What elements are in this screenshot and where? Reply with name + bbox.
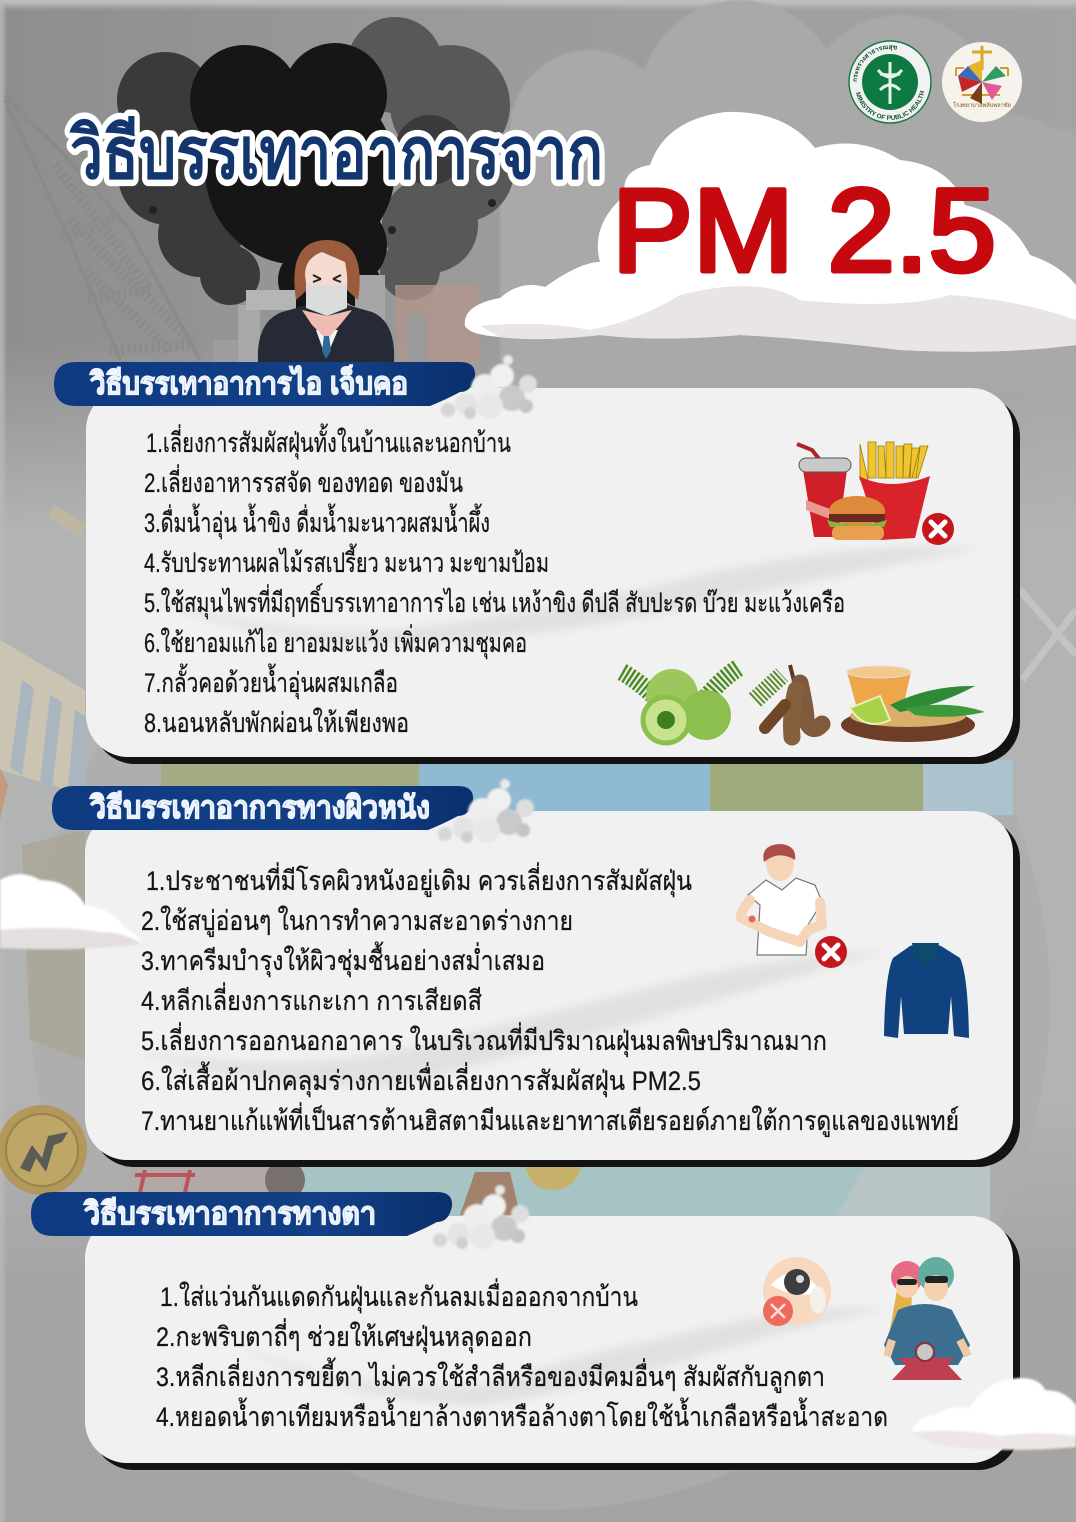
list of remedies: 4.รับประทานผลไม้รสเปรี้ยว มะนาว มะขามป้อม: [144, 543, 549, 578]
panel shadow: [92, 1223, 1020, 1470]
panel: skin symptoms: [52, 779, 1020, 1167]
smoke puff: [438, 779, 534, 843]
panel card: [85, 811, 1013, 1160]
black smoke cloud: [117, 17, 514, 312]
list of remedies: 2.เลี่ยงอาหารรสจัด ของทอด ของมัน: [144, 464, 463, 498]
list of remedies: [144, 423, 845, 738]
panel shadow: [93, 395, 1020, 764]
white cloud behind PM 2.5: [465, 112, 1076, 352]
panel card: [85, 1216, 1013, 1463]
list of remedies: 1.เลี่ยงการสัมผัสฝุ่นทั้งในบ้านและนอกบ้าน: [146, 423, 511, 460]
list of remedies: 7.กลั้วคอด้วยน้ำอุ่นผสมเกลือ: [144, 663, 398, 700]
list of remedies: 8.นอนหลับพักผ่อนให้เพียงพอ: [144, 707, 409, 738]
ribbon heading: [52, 786, 473, 836]
list of remedies: 2.กะพริบตาถี่ๆ ช่วยให้เศษฝุ่นหลุดออก: [156, 1318, 532, 1354]
cloud at left edge: [0, 874, 142, 949]
cloud at lower right: [912, 1378, 1076, 1450]
list of remedies: [156, 1278, 888, 1432]
list of remedies: 6.ใส่เสื้อผ้าปกคลุมร่างกายเพื่อเลี่ยงการสัมผัสฝุ่น PM2.5: [141, 1061, 701, 1098]
background: grey upper clouds: [500, 0, 1076, 390]
list of remedies: [141, 862, 959, 1137]
ribbon heading: [31, 1192, 452, 1242]
panel: cough and sore throat: [54, 355, 1020, 764]
icon: fast food: [797, 442, 954, 545]
background: eiffel tower silhouette: [5, 95, 200, 360]
man with mask: [258, 240, 394, 362]
list of remedies: 1.ใส่แว่นกันแดดกันฝุ่นและกันลมเมื่อออกจากบ้าน: [160, 1278, 638, 1314]
list of remedies: 4.หลีกเลี่ยงการแกะเกา การเสียดสี: [141, 982, 482, 1016]
ministry of public health logo: [848, 40, 932, 124]
list of remedies: 6.ใช้ยาอมแก้ไอ ยาอมมะแว้ง เพิ่มความชุมคอ: [144, 624, 527, 660]
background: coin: [0, 1105, 87, 1195]
city buildings behind figure: [213, 275, 482, 364]
ribbon heading: วิธีบรรเทาอาการไอ เจ็บคอ: [89, 364, 408, 401]
panel card: [86, 388, 1013, 757]
title: วิธีบรรเทาอาการจาก: [69, 114, 603, 194]
panel shadow: [92, 818, 1020, 1167]
smoke puff: [433, 1185, 529, 1249]
ribbon heading: [54, 362, 475, 412]
icon: Indian gooseberries: [622, 668, 738, 743]
list of remedies: 2.ใช้สบู่อ่อนๆ ในการทำความสะอาดร่างกาย: [141, 905, 573, 937]
list of remedies: 5.ใช้สมุนไพรที่มีฤทธิ์บรรเทาอาการไอ เช่น เหง้าขิง ดีปลี สับปะรด บ๊วย มะแว้งเครือ: [144, 583, 845, 620]
ribbon heading: วิธีบรรเทาอาการทางผิวหนัง: [89, 790, 430, 825]
ribbon heading: วิธีบรรเทาอาการทางตา: [83, 1196, 376, 1231]
list of remedies: 1.ประชาชนที่มีโรคผิวหนังอยู่เดิม ควรเลี่ยงการสัมผัสฝุ่น: [146, 862, 692, 898]
panel: eye symptoms: [31, 1185, 1020, 1470]
list of remedies: 3.ทาครีมบำรุงให้ผิวชุ่มชื้นอย่างสม่ำเสมอ: [141, 941, 545, 978]
ministry of public health logo: กระทรวงสาธารณสุข: [853, 45, 897, 82]
list of remedies: 4.หยอดน้ำตาเทียมหรือน้ำยาล้างตาหรือล้างตาโดยใช้น้ำเกลือหรือน้ำสะอาด: [156, 1397, 888, 1432]
list of remedies: 3.ดื่มน้ำอุ่น น้ำขิง ดื่มน้ำมะนาวผสมน้ำผึ้ง: [144, 503, 490, 540]
icon: couple on scooter: [884, 1257, 970, 1380]
ministry of public health logo: MINISTRY OF PUBLIC HEALTH: [856, 90, 924, 120]
icon: blue jacket: [884, 943, 969, 1038]
headline PM 2.5: PM 2.5: [612, 165, 996, 297]
background: building at left: [0, 505, 1076, 1060]
icon: irritated eye: [763, 1257, 831, 1326]
background: globe land and sea strips: [130, 760, 1013, 1220]
list of remedies: 5.เลี่ยงการออกนอกอาคาร ในบริเวณที่มีปริมาณฝุ่นมลพิษปริมาณมาก: [141, 1022, 827, 1058]
icon: tamarind: [755, 665, 822, 737]
list of remedies: 3.หลีกเลี่ยงการขยี้ตา ไม่ควรใช้สำลีหรือของมีคมอื่นๆ สัมผัสกับลูกตา: [156, 1357, 825, 1393]
smoke puff: [441, 355, 537, 419]
icon: ginger and herb tea: [841, 666, 985, 742]
background: globe lower arc: [30, 490, 1050, 1510]
hospital logo: โรงพยาบาลพลับพลาชัย: [953, 101, 1011, 109]
icon: man scratching skin: [741, 844, 847, 968]
hospital logo: [942, 42, 1022, 122]
